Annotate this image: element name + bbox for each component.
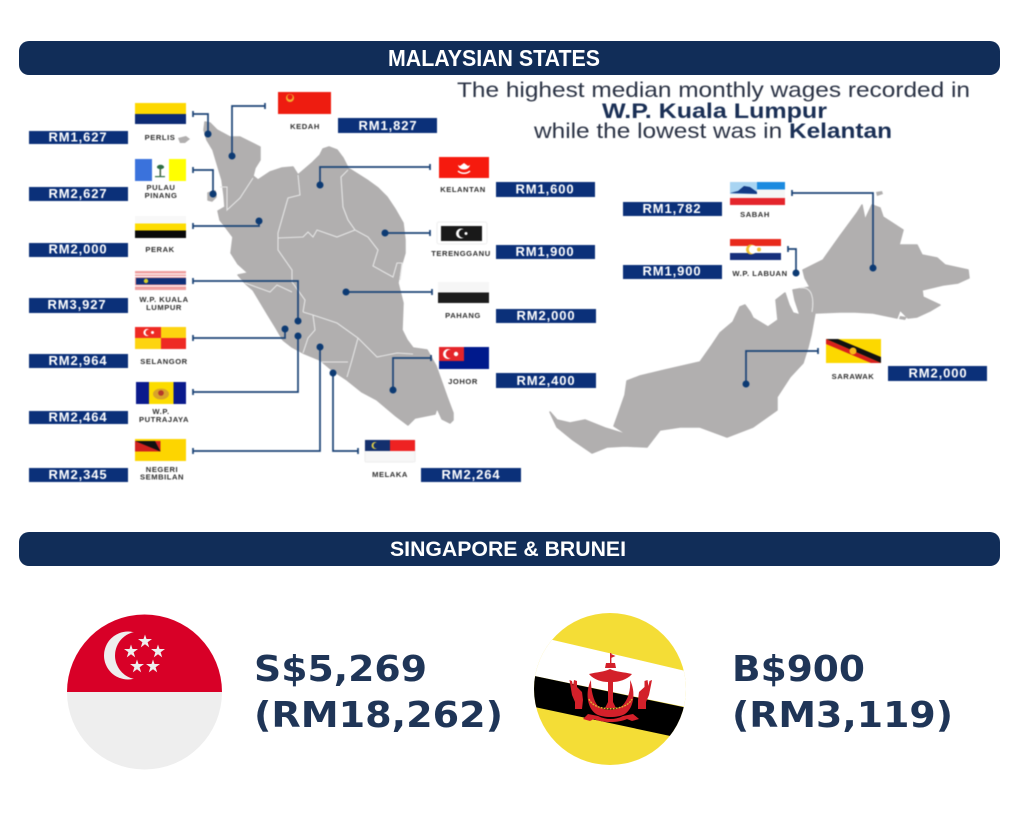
label and value: Pulau Pinang <box>29 183 177 201</box>
connector lines <box>193 103 876 454</box>
label and value: Negeri Sembilan: RM2,345 <box>48 467 108 482</box>
label and value: W.P. Putrajaya: PUTRAJAYA <box>139 415 189 424</box>
label and value: W.P. Putrajaya: RM2,464 <box>48 410 108 424</box>
label and value: Sarawak: RM2,000 <box>908 366 968 380</box>
label and value: Perak: PERAK <box>145 245 175 254</box>
value: Brunei wage: (RM3,119) <box>732 695 953 736</box>
label and value: Johor: RM2,400 <box>516 373 576 388</box>
label and value: Kedah <box>290 118 437 133</box>
label and value: Selangor: RM2,964 <box>48 353 108 368</box>
label and value: Perlis: PERLIS <box>145 133 175 142</box>
label and value: Perlis: RM1,627 <box>48 130 108 144</box>
heading: Malaysian states <box>19 41 1000 75</box>
label and value: W.P. Putrajaya <box>29 407 189 424</box>
label and value: Perak: RM2,000 <box>48 242 108 256</box>
label and value: Melaka: RM2,264 <box>441 467 501 482</box>
label and value: Negeri Sembilan <box>29 465 184 482</box>
label and value: W.P. Kuala Lumpur: W.P. KUALA <box>139 295 189 304</box>
flag: Pahang <box>438 282 489 303</box>
label and value: Terengganu <box>431 244 595 259</box>
flag: Johor <box>439 347 489 369</box>
flag: W.P. Labuan <box>730 239 781 260</box>
value: Singapore wage: S$5,269 <box>254 649 427 690</box>
label and value: Perlis <box>29 130 175 144</box>
label and value: Negeri Sembilan: SEMBILAN <box>140 472 184 482</box>
label and value: Pahang: RM2,000 <box>516 308 576 323</box>
headline text <box>457 79 970 143</box>
label and value: W.P. Labuan: RM1,900 <box>642 264 702 278</box>
label and value: W.P. Labuan <box>623 264 788 279</box>
label and value: Johor <box>448 373 596 388</box>
label and value: Selangor: SELANGOR <box>140 357 188 366</box>
label and value: Sabah <box>623 201 770 219</box>
label and value: Kedah: RM1,827 <box>358 118 418 133</box>
headline text: W.P. Kuala Lumpur <box>602 100 827 123</box>
value: Brunei wage <box>732 649 953 736</box>
label and value: W.P. Kuala Lumpur <box>29 295 189 313</box>
headline text: while the lowest was in Kelantan <box>533 120 892 143</box>
label and value: Pahang <box>445 308 596 323</box>
value: Singapore wage: (RM18,262) <box>254 695 503 736</box>
label and value: Melaka: MELAKA <box>372 470 408 479</box>
flag: W.P. Kuala Lumpur <box>135 271 186 290</box>
icon: Singapore flag <box>67 614 222 770</box>
label and value: Negeri Sembilan: NEGERI <box>146 465 178 474</box>
icon: Brunei flag <box>530 610 690 770</box>
label and value: Sabah: RM1,782 <box>642 201 702 216</box>
label and value: Pulau Pinang: PINANG <box>145 191 177 200</box>
label and value: Pulau Pinang: RM2,627 <box>48 186 108 201</box>
label and value: W.P. Kuala Lumpur: RM3,927 <box>47 297 107 312</box>
value: Singapore wage <box>254 649 503 736</box>
value: Brunei wage: B$900 <box>732 649 865 690</box>
flag: Sabah <box>730 182 785 205</box>
label and value: Johor: JOHOR <box>448 377 478 386</box>
flag: Pulau Pinang <box>135 159 186 181</box>
heading: Singapore and Brunei: SINGAPORE & BRUNEI <box>390 538 626 561</box>
label and value: Sabah: SABAH <box>740 210 770 219</box>
label and value: Melaka <box>372 467 521 482</box>
label and value: Pulau Pinang: PULAU <box>147 183 175 192</box>
label and value: Kelantan: RM1,600 <box>515 182 575 196</box>
label and value: Sarawak: SARAWAK <box>832 372 874 381</box>
flag: Sarawak <box>826 339 881 363</box>
flag: Kedah <box>278 92 331 114</box>
heading: Singapore and Brunei <box>19 532 1000 566</box>
flag: Terengganu <box>437 222 487 244</box>
flag: Negeri Sembilan <box>135 439 186 461</box>
label and value: W.P. Putrajaya: W.P. <box>152 407 170 416</box>
label and value: Terengganu: RM1,900 <box>515 244 575 259</box>
label and value: Kelantan: KELANTAN <box>440 185 486 194</box>
label and value: Sarawak <box>832 366 987 381</box>
heading: Malaysian states: MALAYSIAN STATES <box>388 45 600 71</box>
headline text: The highest median monthly wages recorded in <box>457 79 970 102</box>
map: East Malaysia <box>550 191 969 453</box>
label and value: Kelantan <box>440 182 595 197</box>
label and value: Terengganu: TERENGGANU <box>431 249 491 258</box>
map: Peninsular Malaysia <box>178 122 453 425</box>
flag: W.P. Putrajaya <box>136 382 186 404</box>
flag: Kelantan <box>439 157 489 178</box>
label and value: Kedah: KEDAH <box>290 122 320 131</box>
flag: Selangor <box>135 327 186 349</box>
label and value: Selangor <box>29 353 188 368</box>
flag: Perak <box>135 216 186 238</box>
label and value: Pahang: PAHANG <box>445 311 481 320</box>
label and value: W.P. Kuala Lumpur: LUMPUR <box>146 303 182 312</box>
label and value: Perak <box>29 242 175 257</box>
flag: Melaka <box>365 440 415 462</box>
flag: Perlis <box>135 103 186 124</box>
label and value: W.P. Labuan: W.P. LABUAN <box>732 269 788 278</box>
